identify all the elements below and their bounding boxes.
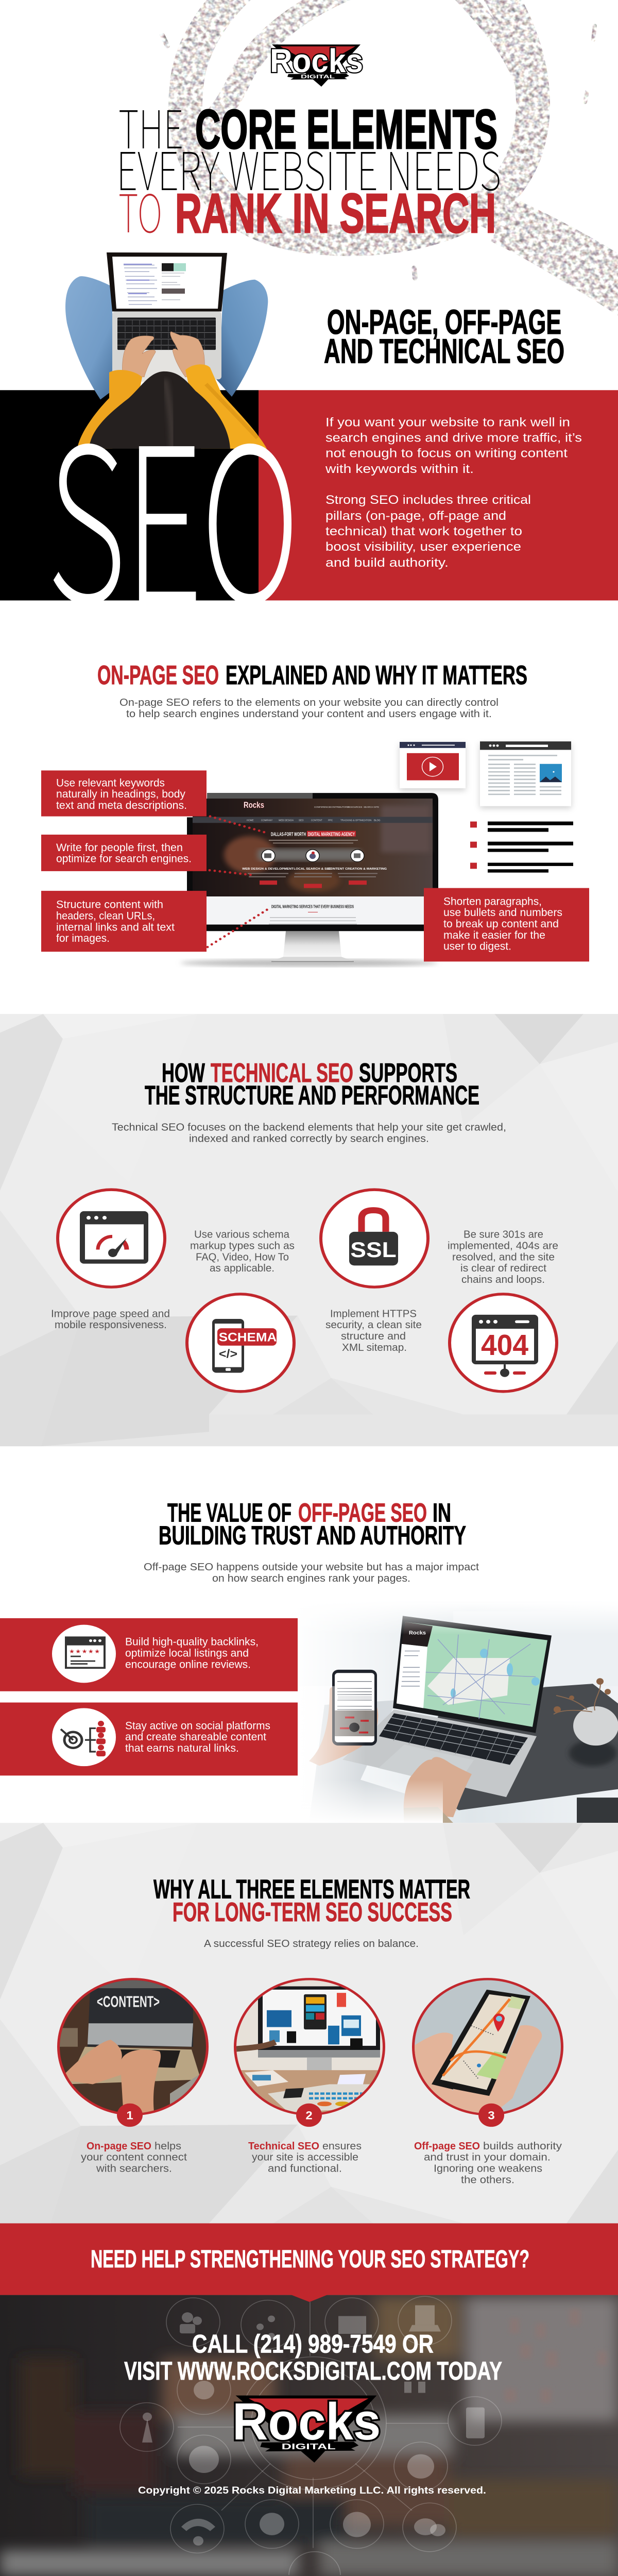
photo fades: [343, 1602, 618, 1633]
text: on-page intro: [119, 697, 499, 720]
trackpad: [379, 1768, 412, 1776]
title: [116, 88, 501, 247]
callout: people first: [41, 835, 207, 871]
icon: schema phone: SCHEMA: [219, 1331, 277, 1344]
intro text: boost visibility, user experience: [325, 540, 521, 554]
badge: 1: [117, 2104, 143, 2127]
badge: 1: 1: [126, 2109, 133, 2122]
callout: people first: optimize for search engines.: [56, 853, 192, 865]
callout: structure: for images.: [56, 932, 110, 944]
text: on-page summary: On-page SEO: [87, 2141, 151, 2152]
text: https: structure and: [341, 1331, 406, 1342]
callout: shorten paragraphs: [424, 888, 589, 961]
jeans right: [216, 280, 268, 397]
logo: Rocks Digital (header): DIGITAL: [301, 74, 335, 80]
text: page speed: [51, 1308, 170, 1331]
site nav: HOME: [247, 819, 254, 822]
callout: shorten paragraphs: make it easier for the: [443, 929, 545, 941]
text: off-page intro: Off-page SEO happens outside your website but has a major impact: [144, 1562, 479, 1573]
hero crowd magnifying-glass image: [162, 0, 618, 309]
heading: off-page seo: [159, 1499, 466, 1550]
text: off-page summary: Off-page SEO: [414, 2141, 480, 2152]
heading: why all three: [153, 1874, 470, 1927]
text: redirects: Be sure 301s are: [464, 1229, 543, 1240]
icon: review window: [52, 1625, 116, 1683]
logo: Rocks Digital (header): Rocks: [270, 43, 363, 79]
card: backlinks: optimize local listings and: [125, 1647, 249, 1659]
text: on-page summary: helps: [154, 2141, 181, 2152]
badge: 3: 3: [488, 2109, 495, 2122]
text: schema markup: Use various schema: [194, 1229, 289, 1240]
phone: [332, 1670, 377, 1745]
text: balance: A successful SEO strategy relies on balance.: [204, 1938, 419, 1950]
heading: off-page seo: THE VALUE OF: [167, 1499, 291, 1528]
photo: person typing on laptop from above: [65, 252, 268, 449]
photo: laptop map and phone on table: Rocks: [409, 1630, 426, 1636]
callout: shorten paragraphs: use bullets and numbers: [443, 906, 562, 919]
intro text: Strong SEO includes three critical: [325, 494, 531, 507]
site nav: WEB DESIGN: [279, 819, 294, 822]
site columns: LOCAL SEARCH & SEO: [294, 867, 332, 871]
text: off-page summary: the others.: [461, 2174, 514, 2185]
callout: structure: headers, clean URLs,: [56, 910, 155, 922]
site headline: [307, 831, 356, 837]
icon: schema phone: [187, 1294, 294, 1392]
photo circle: phone map: [412, 1976, 564, 2117]
text: https: Implement HTTPS: [330, 1308, 417, 1319]
text: technical intro: [112, 1122, 506, 1144]
callout: keywords: Use relevant keywords: [56, 776, 165, 789]
footer background photo with network icons: [0, 2295, 618, 2576]
text: technical intro: Technical SEO focuses on the backend elements that help your site get crawled,: [112, 1122, 506, 1133]
card: social: [0, 1703, 298, 1775]
text: redirects: implemented, 404s are: [448, 1240, 558, 1251]
intro text: technical) that work together to: [325, 525, 522, 538]
text: redirects: is clear of redirect: [460, 1263, 546, 1274]
intro text: [325, 416, 582, 570]
site nav: TRACKING & OPTIMIZATION: [340, 819, 371, 822]
callout: people first: Write for people first, then: [56, 841, 183, 854]
intro text: search engines and drive more traffic, it’s: [325, 431, 582, 445]
laptop keyboard: [379, 1713, 528, 1765]
site columns: WEB DESIGN & DEVELOPMENT: [242, 867, 294, 871]
heading: off-page seo: IN: [433, 1499, 451, 1528]
icon: schema phone: </>: [219, 1347, 237, 1361]
screen: [107, 252, 227, 312]
text: schema markup: markup types such as: [190, 1240, 295, 1251]
card: backlinks: Build high-quality backlinks,: [125, 1636, 259, 1648]
vase and twigs: [573, 1706, 618, 1745]
icon: 404 page: [450, 1294, 557, 1392]
text: on-page intro: On-page SEO refers to the elements on your website you can directly control: [119, 697, 499, 708]
site icons: [262, 850, 364, 862]
panel: why all three background: [0, 1823, 618, 2223]
right hand: [404, 1757, 472, 1817]
laptop base: [112, 312, 221, 379]
hair: [89, 371, 230, 449]
monitor with website: DIGITAL MARKETING SERVICES THAT EVERY BUSINESS NEEDS: [271, 904, 354, 909]
text: technical intro: indexed and ranked correctly by search engines.: [189, 1133, 429, 1144]
callout: structure: [41, 891, 207, 952]
site nav: SEARCH SITE: [364, 806, 379, 808]
title: THE: [118, 88, 183, 164]
text: copyright: Copyright © 2025 Rocks Digital Marketing LLC. All rights reserved.: [138, 2485, 486, 2496]
site nav: SEO: [299, 819, 304, 822]
text: schema markup: as applicable.: [210, 1263, 274, 1274]
text: technical summary: and functional.: [268, 2163, 342, 2174]
text: redirects: resolved, and the site: [452, 1251, 555, 1263]
card: social: Stay active on social platforms: [125, 1719, 270, 1732]
intro text: If you want your website to rank well in: [325, 416, 570, 429]
text: https: [325, 1308, 422, 1353]
table: [438, 1684, 618, 1810]
intro text: and build authority.: [325, 556, 449, 570]
text: on-page intro: to help search engines understand your content and users engage with it.: [126, 708, 492, 720]
laptop screen: [393, 1616, 552, 1733]
text: redirects: [448, 1229, 558, 1285]
logo: Rocks Digital (footer): Rocks: [232, 2393, 381, 2451]
intro text: not enough to focus on writing content: [325, 447, 568, 460]
logo: Rocks Digital (footer): DIGITAL: [282, 2442, 336, 2451]
card: social: that earns natural links.: [125, 1742, 239, 1754]
site nav: COMPANY: [261, 819, 273, 822]
site nav: BLOG: [374, 819, 381, 822]
stand: [283, 931, 341, 957]
text: redirects: chains and loops.: [461, 1274, 545, 1285]
text: on-page summary: [81, 2141, 187, 2174]
card: social: and create shareable content: [125, 1731, 266, 1743]
callout: shorten paragraphs: user to digest.: [443, 940, 511, 952]
callout: shorten paragraphs: to break up content and: [443, 918, 559, 930]
screen photo: [193, 799, 433, 896]
photo: laptop map and phone on table: [288, 1602, 618, 1823]
badge: 2: 2: [305, 2109, 313, 2122]
text: schema markup: [190, 1229, 295, 1274]
left hand: [309, 1687, 378, 1766]
icon: target and audience: [52, 1708, 116, 1766]
photo circle: content laptop: [57, 1976, 209, 2117]
icon: page speed: [58, 1190, 165, 1287]
intro text: with keywords within it.: [325, 463, 474, 476]
subtitle: on-page, off-page and technical seo: [324, 303, 564, 370]
heading: on-page seo: [97, 660, 527, 690]
icon: document browser window: [480, 741, 571, 806]
site nav: CONTRIBUTORS: [330, 806, 349, 808]
site columns: CONTENT CREATION & MARKETING: [328, 867, 387, 871]
intro text: pillars (on-page, off-page and: [325, 510, 506, 523]
callout: structure: internal links and alt text: [56, 921, 175, 933]
monitor with website: DALLAS-FORT WORTH: [271, 832, 306, 838]
photo circle: site wireframe monitor: [234, 1976, 386, 2122]
badge: 2: [296, 2104, 322, 2127]
panel: technical seo background: [0, 1014, 618, 1446]
frame: [187, 793, 438, 931]
text: page speed: mobile responsiveness.: [55, 1319, 167, 1331]
title: TO: [118, 172, 162, 247]
text: technical summary: [248, 2141, 362, 2174]
heading: technical seo: [145, 1058, 479, 1110]
text: schema markup: FAQ, Video, How To: [196, 1251, 289, 1263]
icon: ssl padlock: SSL: [350, 1238, 397, 1262]
callout: shorten paragraphs: Shorten paragraphs,: [443, 895, 542, 907]
big SEO lettering: SEO: [48, 358, 299, 661]
icon: bullet list: [470, 822, 573, 873]
text: off-page summary: [414, 2141, 562, 2185]
network icon rings: [120, 2296, 502, 2575]
laptop base: [342, 1709, 537, 1797]
site nav: [247, 806, 381, 822]
site nav: PPC: [328, 819, 333, 822]
heading: technical seo: SUPPORTS: [359, 1058, 457, 1088]
dotted connector lines: [208, 817, 267, 947]
text: off-page summary: Ignoring one weakens: [434, 2163, 542, 2174]
callout: keywords: [41, 770, 207, 817]
monitor with website: DIGITAL MARKETING AGENCY: [308, 832, 355, 838]
heading: technical seo: TECHNICAL SEO: [211, 1058, 353, 1088]
site nav: CONFERENCE: [314, 806, 331, 808]
panel: intro black and red band: [0, 390, 618, 600]
heading: on-page seo: ON-PAGE SEO: [97, 660, 219, 690]
site columns: [242, 867, 387, 871]
text: technical summary: Technical SEO: [248, 2141, 319, 2152]
text: https: security, a clean site: [325, 1319, 422, 1331]
hands: [123, 332, 204, 377]
text: page speed: Improve page speed and: [51, 1308, 170, 1319]
text: off-page intro: on how search engines rank your pages.: [212, 1573, 410, 1584]
text: on-page summary: your content connect: [81, 2152, 187, 2163]
icon: 404 page: 404: [481, 1329, 528, 1361]
callout: keywords: text and meta descriptions.: [56, 799, 187, 811]
icon: video browser window: [400, 742, 466, 788]
sweater: [77, 370, 142, 449]
text: off-page intro: [144, 1562, 479, 1584]
heading: technical seo: HOW: [162, 1058, 205, 1088]
jeans left: [65, 276, 121, 399]
text: technical summary: ensures: [322, 2141, 362, 2152]
text: off-page summary: builds authority: [483, 2141, 562, 2152]
icon: ssl padlock: [321, 1190, 428, 1287]
call to action: CALL (214) 989-7549 OR: [192, 2330, 434, 2359]
keyboard: [117, 317, 216, 350]
site services band: [193, 896, 433, 925]
site nav: CONTENT: [311, 819, 322, 822]
site logo: Rocks: [244, 800, 264, 810]
monitor with website: [180, 793, 438, 967]
text: on-page summary: with searchers.: [96, 2163, 172, 2174]
text: https: XML sitemap.: [342, 1342, 407, 1353]
badge: 3: [478, 2104, 504, 2127]
heading: off-page seo: OFF-PAGE SEO: [298, 1499, 427, 1528]
photo circle: content laptop: <CONTENT>: [97, 1993, 160, 2010]
text: technical summary: your site is accessible: [252, 2152, 358, 2163]
site nav: RESOURCES: [348, 806, 363, 808]
callout: keywords: naturally in headings, body: [56, 788, 185, 800]
network icons: [142, 2306, 485, 2546]
card: backlinks: encourage online reviews.: [125, 1658, 251, 1670]
card: backlinks: [0, 1618, 298, 1691]
banner: need help: [0, 2223, 618, 2302]
icon: review window: ★★★★★: [69, 1649, 100, 1655]
text: off-page summary: and trust in your domain.: [424, 2152, 551, 2163]
call to action: [124, 2330, 502, 2386]
callout: structure: Structure content with: [56, 899, 163, 910]
